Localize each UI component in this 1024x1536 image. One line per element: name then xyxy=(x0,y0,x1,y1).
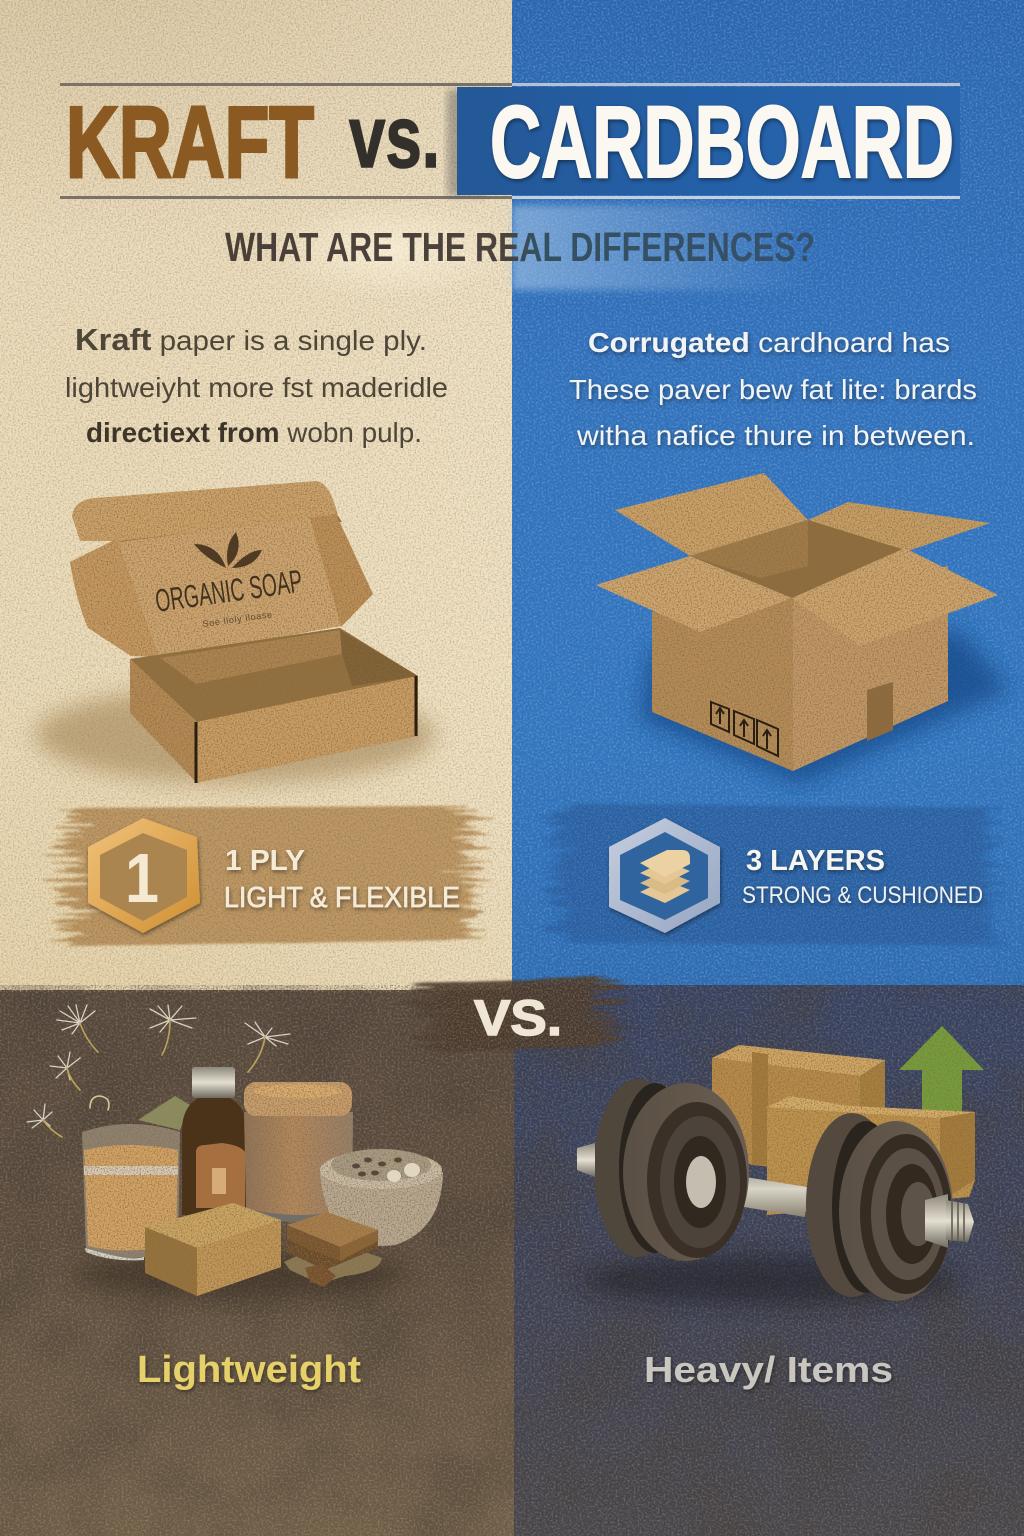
leaf packet xyxy=(138,1096,190,1130)
illustration: open cardboard box xyxy=(596,473,1010,785)
front left flap xyxy=(596,556,792,632)
title band: cardboard xyxy=(457,87,960,195)
illustration: dumbbell with boxes and arrow xyxy=(577,1026,984,1304)
box lid inner panel xyxy=(118,518,341,659)
badge: 3 layers xyxy=(555,804,990,945)
subtitle: WHAT ARE THE REAL DIFFERENCES? xyxy=(225,224,815,270)
illustration: kraft mailer box: Soe lloly lloase xyxy=(202,609,273,629)
panel: cardboard background xyxy=(512,0,1024,992)
box interior xyxy=(130,628,418,722)
panel: heavy items background xyxy=(514,985,1024,1536)
box lid right flap xyxy=(308,514,373,627)
logo text: organic soap: ORGANIC SOAP xyxy=(153,563,305,619)
handling icons xyxy=(711,702,778,756)
vs divider: VS. xyxy=(474,990,562,1046)
left plates xyxy=(577,1079,749,1261)
title word: kraft: KRAFT xyxy=(66,87,314,199)
text block: kraft description xyxy=(65,322,448,448)
badge heading: 1 PLY xyxy=(225,845,305,877)
title xyxy=(60,83,960,199)
stacked boxes xyxy=(712,1045,975,1215)
brush stroke xyxy=(555,804,990,945)
text block: cardboard description: Corrugated cardhoard has xyxy=(588,327,950,358)
small kraft box xyxy=(145,1203,281,1296)
text block: cardboard description: witha nafice thure in between. xyxy=(576,420,975,451)
label: lightweight: Lightweight xyxy=(137,1349,361,1391)
soap bars xyxy=(284,1212,382,1287)
box front wall xyxy=(197,676,418,783)
vs divider xyxy=(420,976,610,1052)
badge caption: LIGHT & FLEXIBLE xyxy=(224,882,460,914)
text block: cardboard description: These paver bew fat lite: brards xyxy=(569,374,977,405)
tan jar xyxy=(244,1082,353,1222)
back left flap xyxy=(615,473,808,556)
panel: lightweight background xyxy=(0,990,514,1536)
badge caption: STRONG & CUSHIONED xyxy=(742,882,983,909)
bar xyxy=(702,1170,807,1217)
icon: hexagon with 1: 1 xyxy=(125,839,159,917)
badge: 1 ply xyxy=(70,806,470,946)
logo: leaves xyxy=(194,532,262,568)
box left wall xyxy=(130,659,197,783)
label: heavy items: Heavy/ Items xyxy=(644,1349,893,1390)
box lid top flap xyxy=(72,481,338,541)
brush stroke xyxy=(70,806,470,946)
text block: cardboard description xyxy=(569,327,977,451)
illustration: kraft mailer box xyxy=(35,481,435,783)
right plates xyxy=(806,1113,974,1301)
panel: kraft background xyxy=(0,0,512,992)
text block: kraft description: directiext from wobn pulp. xyxy=(86,417,422,448)
green arrow xyxy=(899,1026,984,1116)
icon: hexagon with 1 xyxy=(88,818,200,933)
glass jar xyxy=(82,1124,180,1260)
badge heading: 3 LAYERS xyxy=(746,845,885,877)
box left face xyxy=(652,598,793,771)
text block: kraft description: Kraft paper is a single ply. xyxy=(75,322,427,357)
box interior xyxy=(690,520,905,598)
illustration: lightweight items xyxy=(27,1005,443,1297)
front right flap xyxy=(792,548,998,646)
dandelion seeds xyxy=(27,1005,290,1137)
box right face xyxy=(793,566,948,771)
bottle xyxy=(182,1067,247,1215)
title word: vs: vs. xyxy=(349,87,440,186)
icon: hexagon with layers xyxy=(609,818,720,933)
box lid left flap xyxy=(70,538,160,657)
bowl xyxy=(320,1149,443,1246)
text block: kraft description: lightweiyht more fst maderidle xyxy=(65,372,448,403)
back right flap xyxy=(808,502,990,552)
bowl contents xyxy=(352,1158,420,1182)
